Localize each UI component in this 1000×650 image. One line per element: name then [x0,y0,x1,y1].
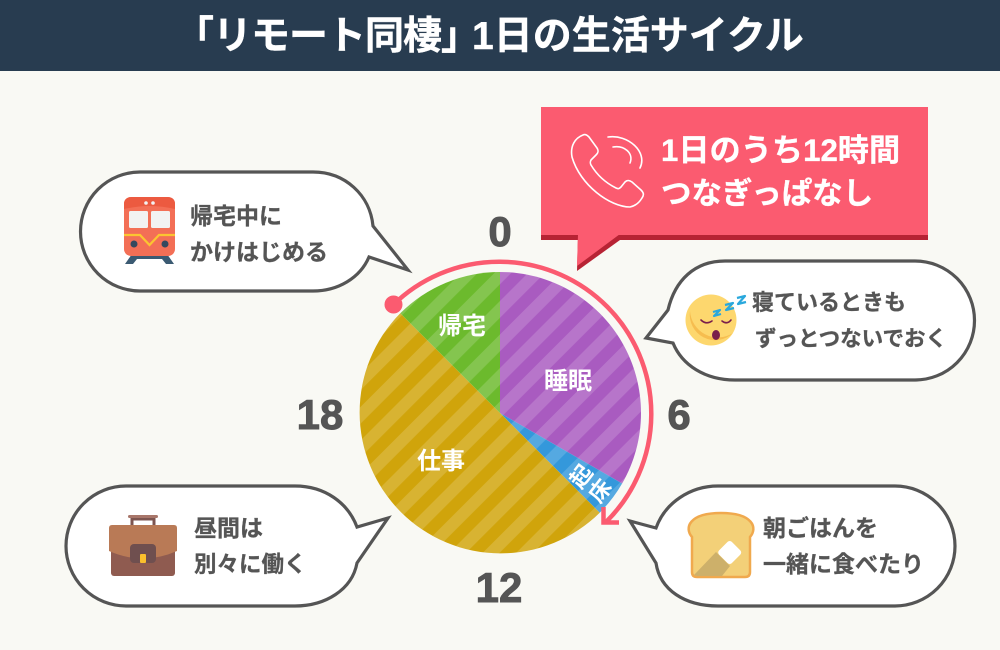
speech bubble: sleeping [646,261,974,380]
icon: toast [689,513,753,577]
pie chart: daily cycle [360,272,641,553]
slice: wake up [500,413,622,513]
speech bubble: daytime work: 別々に働く [194,552,307,577]
speech bubble: sleeping: ずっとつないでおく [755,327,947,351]
text: 昼間は [194,515,263,541]
slice: commute home: 帰宅 [438,313,486,340]
slice: work: 仕事 [417,448,465,475]
slice: work [360,313,600,553]
slice: wake up: 床 [584,475,617,507]
speech bubble: breakfast: 一緒に食べたり [763,551,924,577]
text: 朝ごはんを [763,515,878,541]
slice: wake up: 起 [565,460,598,493]
callout: 12 hours connected [541,107,928,271]
speech bubble: commute [81,172,408,291]
text: 帰宅中に [190,203,282,229]
icon: telephone [572,135,643,207]
title banner: 「リモート同棲」 [175,15,479,58]
icon: briefcase [109,515,177,576]
hour label 6: 6 [667,391,691,438]
speech bubble: breakfast [630,486,955,606]
arrow: 12 hour connected arc [384,262,651,522]
icon: sleeping face [686,294,746,346]
text: 寝ているときも [752,290,906,315]
speech bubble: daytime work [66,486,388,606]
callout: 12 hours connected: つなぎっぱなし [661,177,873,211]
icon: train [124,197,175,264]
hour label 18: 18 [297,391,343,438]
title banner: 1日の生活サイクル [472,15,804,58]
slice: sleep [500,272,641,484]
callout text: 1日のうち12時間 [661,133,900,168]
speech bubble: commute: かけはじめる [190,239,328,265]
title banner [0,0,1000,71]
hour label 0: 0 [488,208,512,255]
slice: commute home [400,272,500,413]
hour label 12: 12 [476,564,522,611]
slice: sleep: 睡眠 [544,368,592,395]
